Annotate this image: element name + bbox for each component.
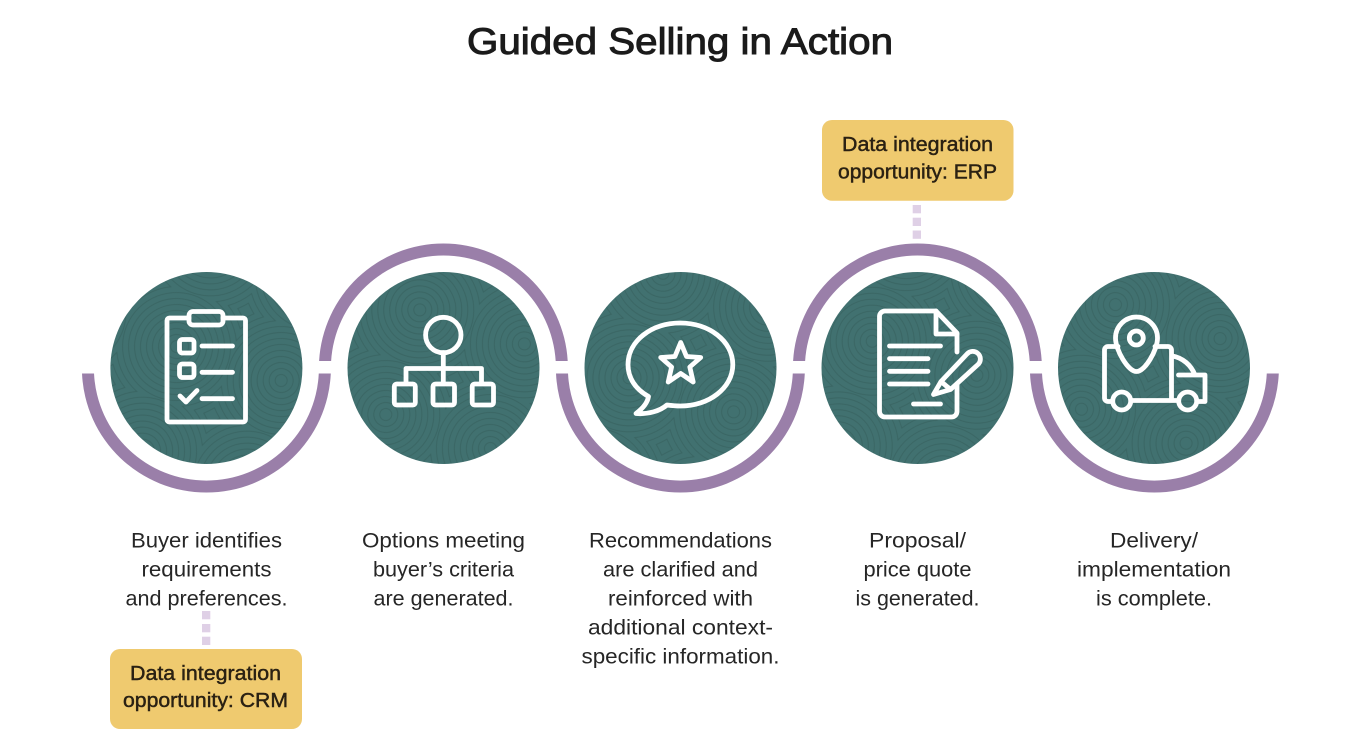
step 4 text: Proposal/ — [869, 530, 966, 552]
callout: ERP — [822, 120, 1014, 201]
panel: step 2 options — [348, 272, 540, 464]
icon: org chart — [394, 317, 494, 405]
callout connector: ERP — [913, 205, 921, 239]
icon: delivery truck with pin — [1104, 317, 1205, 410]
step 4 text: price quote — [864, 558, 972, 582]
panel: step 1 requirements — [110, 272, 302, 464]
teal circle — [348, 272, 540, 464]
panel: step 5 delivery — [1058, 272, 1250, 464]
panel: step 4 proposal — [822, 272, 1014, 464]
step 5 text: is complete. — [1096, 588, 1212, 610]
icon: speech bubble with star — [628, 323, 733, 414]
step 2 text: are generated. — [374, 588, 514, 610]
callout: ERP: Data integration — [842, 134, 993, 156]
step 2 text: Options meeting — [362, 530, 525, 552]
callout: ERP: opportunity: ERP — [838, 161, 997, 183]
arc: step 2 top — [319, 244, 568, 361]
callout: CRM — [110, 649, 302, 729]
title: Guided Selling in Action — [467, 21, 893, 62]
step 3 text: specific information. — [582, 646, 780, 668]
step 2 text: buyer’s criteria — [373, 558, 514, 582]
panel: step 3 recommendations — [584, 272, 776, 464]
step 1 text — [126, 530, 288, 610]
step 1 text: and preferences. — [126, 588, 288, 610]
step 3 text: Recommendations — [589, 530, 772, 552]
step 3 text — [582, 530, 780, 668]
step 5 text: implementation — [1077, 558, 1231, 582]
teal circle — [110, 272, 302, 464]
connector arcs — [82, 244, 1279, 493]
callout connector: CRM — [202, 611, 210, 645]
step 2 text — [362, 530, 525, 610]
arc: step 4 top — [793, 244, 1042, 361]
teal circle — [822, 272, 1014, 464]
step 3 text: are clarified and — [603, 558, 758, 582]
teal circle — [1058, 272, 1250, 464]
step 3 text: reinforced with — [608, 588, 753, 610]
step 1 text: requirements — [142, 558, 272, 582]
step 4 text — [856, 530, 980, 610]
callout: CRM: opportunity: CRM — [123, 690, 288, 712]
icon: document with pencil — [880, 311, 980, 417]
step 5 text — [1077, 530, 1231, 610]
arc: step 1 bottom — [82, 374, 331, 493]
step 5 text: Delivery/ — [1110, 530, 1198, 552]
teal circle — [584, 272, 776, 464]
icon: clipboard checklist — [167, 312, 246, 422]
callout: CRM: Data integration — [130, 663, 281, 685]
step 3 text: additional context- — [588, 616, 773, 640]
arc: step 5 bottom — [1030, 374, 1279, 493]
step 1 text: Buyer identifies — [131, 530, 282, 552]
step 4 text: is generated. — [856, 588, 980, 610]
arc: step 3 bottom — [556, 374, 805, 493]
